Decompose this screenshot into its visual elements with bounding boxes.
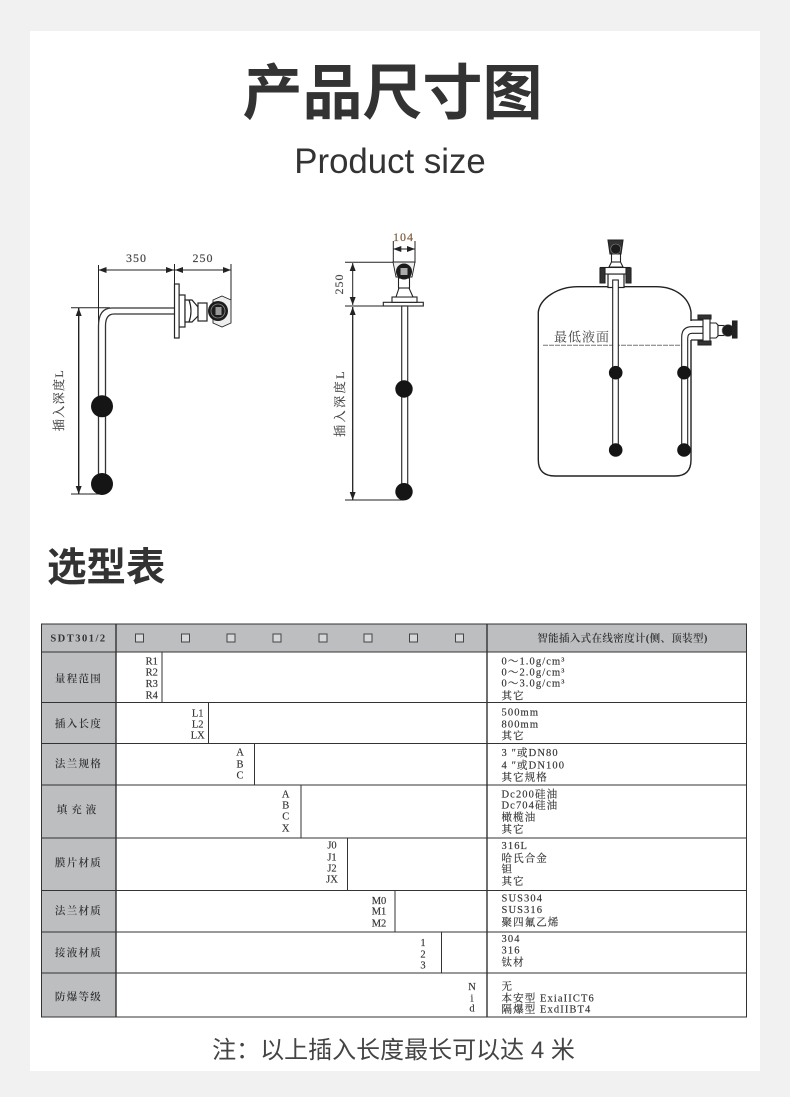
option descriptions: SUS316: [502, 905, 543, 916]
L-shaped pipe: [98, 308, 175, 484]
option codes: LX: [191, 730, 205, 742]
top probe and transmitter: [600, 240, 631, 450]
option codes: X: [282, 824, 290, 834]
option codes: R4: [146, 690, 159, 702]
header: model: SDT301/2: [50, 634, 107, 644]
label: minimum liquid level: 最低液面: [554, 330, 610, 344]
dimension lines: [345, 241, 415, 500]
option codes: B: [236, 760, 244, 770]
float balls: [91, 395, 113, 495]
label: insertion depth: 插入深度L: [332, 369, 347, 437]
title: 产品尺寸图: [242, 60, 542, 127]
option descriptions: 316L: [502, 841, 528, 852]
option descriptions: 其它: [502, 874, 525, 888]
probe pipe: [402, 306, 408, 492]
option descriptions: 0～3.0g/cm³: [502, 678, 566, 690]
option descriptions: 其它: [502, 729, 525, 742]
row labels: 量程范围: [55, 672, 102, 685]
footnote: 注：以上插入长度最长可以达 4 米: [212, 1037, 575, 1064]
dimension lines: [71, 264, 231, 494]
option descriptions: 500mm: [502, 708, 539, 718]
option codes: M2: [372, 918, 386, 930]
option codes: [146, 656, 476, 1014]
option descriptions: 其它: [502, 689, 525, 702]
option codes: C: [282, 812, 289, 822]
option codes: A: [236, 748, 244, 758]
option descriptions: 橄榄油: [502, 810, 536, 824]
row labels: [55, 672, 102, 1003]
side probe and transmitter: [682, 315, 737, 450]
heading: selection table: 选型表: [47, 546, 166, 590]
tank outline: [538, 287, 691, 476]
header: code boxes: [136, 634, 464, 642]
option codes: B: [282, 800, 289, 812]
option descriptions: 0～1.0g/cm³: [502, 656, 566, 668]
option codes: JX: [326, 874, 338, 886]
option codes: M0: [372, 896, 386, 907]
diagram: tank installation: [538, 240, 737, 476]
option descriptions: 钽: [502, 862, 513, 876]
row labels: 插入长度: [55, 717, 102, 730]
option codes: L2: [192, 720, 204, 730]
row labels: 接液材质: [55, 946, 102, 959]
label: 250: 250: [332, 274, 346, 294]
subtitle: Product size: [294, 142, 486, 181]
option codes: 3: [420, 960, 426, 972]
option codes: M1: [372, 906, 386, 918]
option codes: R1: [146, 656, 158, 668]
row labels: 法兰规格: [55, 757, 102, 770]
option descriptions: 800mm: [502, 720, 539, 730]
row labels: 填充液: [57, 803, 100, 816]
option codes: N: [468, 982, 476, 993]
option descriptions: 316: [502, 946, 521, 956]
selection table: [42, 624, 746, 1017]
option codes: 2: [420, 950, 426, 960]
option codes: A: [282, 790, 290, 800]
option codes: R3: [146, 679, 158, 690]
option codes: J0: [327, 840, 337, 852]
option codes: C: [236, 770, 244, 782]
option codes: R2: [146, 668, 158, 678]
option descriptions: 钛材: [502, 956, 525, 968]
option descriptions: 聚四氟乙烯: [502, 916, 560, 928]
label: 104: 104: [393, 230, 414, 244]
header: description: 智能插入式在线密度计(侧、顶装型): [537, 632, 708, 644]
diagram: side mounted dimensions: [51, 251, 231, 495]
float balls: [609, 366, 691, 457]
option codes: J2: [327, 864, 337, 874]
label: insertion depth: 插入深度L: [51, 369, 66, 431]
option descriptions: Dc200硅油: [502, 788, 558, 800]
option descriptions: 3 ″或DN80: [502, 746, 559, 759]
option descriptions: 隔爆型 ExdIIBT4: [502, 1002, 591, 1016]
label: 250: 250: [192, 251, 214, 265]
option codes: i: [471, 994, 474, 1004]
option descriptions: Dc704硅油: [502, 798, 558, 812]
option codes: d: [469, 1004, 475, 1014]
table shading: [42, 624, 746, 1017]
option descriptions: 其它: [502, 822, 525, 836]
option descriptions: SUS304: [502, 894, 543, 904]
option codes: 1: [420, 938, 426, 949]
option descriptions: 本安型 ExiaIICT6: [502, 992, 595, 1004]
option descriptions: 无: [502, 980, 513, 992]
option descriptions: [502, 656, 595, 1016]
option codes: J1: [327, 852, 337, 864]
flange and transmitter: [383, 262, 423, 306]
row labels: 防爆等级: [55, 990, 102, 1003]
option descriptions: 0～2.0g/cm³: [502, 668, 566, 678]
option descriptions: 4 ″或DN100: [502, 758, 565, 772]
option descriptions: 其它规格: [502, 770, 548, 784]
float balls: [395, 380, 413, 500]
label: 350: 350: [126, 251, 147, 265]
diagram: top mounted dimensions: [332, 230, 423, 500]
flange and transmitter: [174, 284, 231, 338]
table grid: [42, 624, 746, 1017]
row labels: 膜片材质: [55, 856, 102, 869]
option codes: L1: [192, 708, 204, 720]
option descriptions: 哈氏合金: [502, 852, 548, 864]
minimum level line: [543, 344, 687, 346]
row labels: 法兰材质: [55, 904, 102, 917]
option descriptions: 304: [502, 934, 521, 945]
